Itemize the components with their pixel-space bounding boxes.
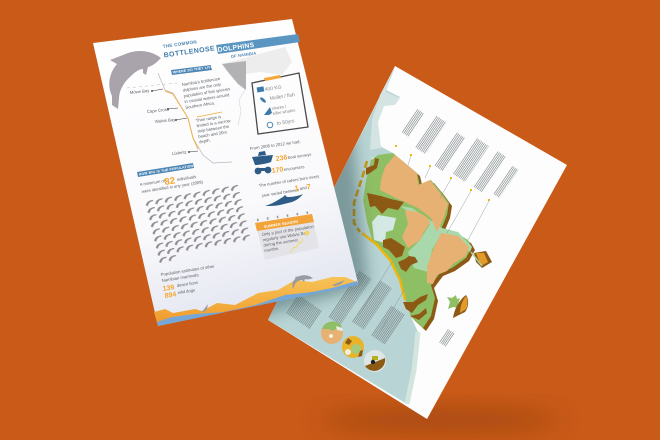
tan highlands middle xyxy=(402,210,430,248)
yellow coastal strip xyxy=(362,233,405,300)
caption block xyxy=(444,336,450,340)
title: BOTTLENOSE xyxy=(163,45,216,59)
front page cast shadow xyxy=(268,135,374,322)
stat: other mammals: desert lions xyxy=(176,280,198,288)
tan highlands south xyxy=(427,233,469,284)
calendar: summer season: SUMMER SEASON xyxy=(264,220,299,229)
stat: calves xyxy=(258,173,321,206)
place labels and arrows xyxy=(127,83,198,156)
stat: survey intro: From 2008 to 2012 we had: xyxy=(249,139,301,151)
calendar: summer season: during the summer xyxy=(263,237,299,248)
place labels and arrows: Walvis Bay xyxy=(155,117,176,124)
icon: footer fins xyxy=(202,280,345,312)
panel: back page map poster xyxy=(268,66,567,419)
stat: minimum individuals: were identified in any year (2009) xyxy=(141,179,204,194)
icon: weight xyxy=(257,86,264,92)
title: DOLPHINS xyxy=(217,42,255,54)
clipboard rows: to 50yrs xyxy=(276,118,295,127)
clipboard rows: sharks / xyxy=(271,104,287,111)
title: THE COMMON xyxy=(162,39,198,49)
map land xyxy=(363,153,472,328)
stat: encounters: 170 xyxy=(271,166,284,175)
place labels and arrows: Cape Cross xyxy=(147,107,169,114)
stat: boat surveys: 236 xyxy=(275,154,288,163)
icon: leaping dolphin xyxy=(109,51,161,109)
icon: clock xyxy=(267,122,273,128)
text block: population: population of this species xyxy=(183,86,230,98)
stat: calves: 1 xyxy=(294,183,299,193)
text blocks: upper column xyxy=(395,121,509,240)
icon: circle habitat 1 xyxy=(321,321,343,344)
icon: clipboard clip xyxy=(264,75,281,81)
coast mint strip xyxy=(407,332,418,404)
stat: other mammals: 139 xyxy=(162,284,175,293)
map: Namibia outline xyxy=(158,47,292,163)
calendar: summer season: regularly use Walvis Bay xyxy=(262,230,309,242)
heading: population size: HOW BIG IS THE POPULATION? xyxy=(139,164,196,176)
stat: calves: The number of calves born every xyxy=(258,173,321,188)
stat: encounters xyxy=(255,164,305,175)
map relief shadow xyxy=(366,156,475,331)
text block: population: dolphins are the only xyxy=(182,82,222,93)
footer: dune wave xyxy=(154,277,358,326)
clipboard rows: Mullet / fish xyxy=(269,92,296,102)
icon: dolphin and calf xyxy=(265,194,303,206)
stat: minimum individuals: individuals xyxy=(176,174,196,182)
text block: population: Namibia's bottlenose xyxy=(181,76,221,87)
title xyxy=(162,34,300,59)
footer: sea band xyxy=(157,281,358,326)
title: OF NAMIBIA xyxy=(230,50,257,59)
mockup scene xyxy=(93,19,567,440)
text block: range: limited to a narrow xyxy=(196,118,232,128)
pictogram: 82 dolphins xyxy=(144,183,252,264)
text block: population: Southern Africa. xyxy=(185,100,215,110)
ground shadow xyxy=(320,410,560,430)
calendar: summer season xyxy=(255,212,319,260)
text blocks: sea column xyxy=(292,262,404,332)
panel: front page dolphin infographic xyxy=(93,19,358,326)
clipboard xyxy=(252,73,308,134)
text block: range: beach and 20m xyxy=(198,129,228,139)
icon: circle habitat 3 xyxy=(364,350,386,372)
icon: shark xyxy=(264,107,272,115)
stat: other mammals: wild dogs xyxy=(177,287,195,295)
dashed coastal zones xyxy=(354,161,367,232)
clipboard rows: 400 KG xyxy=(264,84,282,93)
calendar: summer season: months. xyxy=(264,246,279,253)
place labels and arrows: Lüderitz xyxy=(172,149,187,156)
clipboard rows xyxy=(264,84,296,127)
stat: minimum individuals: A minimum of xyxy=(139,178,166,187)
stat: minimum individuals: 82 xyxy=(164,175,176,188)
text block: range: Their range is xyxy=(195,114,221,123)
clipboard rows: killer whales xyxy=(272,107,296,116)
tan highlands north xyxy=(380,155,448,232)
text block: range: depth. xyxy=(199,138,211,144)
sea xyxy=(268,67,418,404)
stat: encounters: encounters xyxy=(283,164,305,172)
brown relief blotches xyxy=(366,158,428,320)
icon: sun xyxy=(305,231,309,235)
stat: calves: 7 xyxy=(306,182,311,191)
heading: where do they live: WHERE DO THEY LIVE? xyxy=(173,65,216,74)
icon: circle habitat 2 xyxy=(342,336,364,358)
stat: other mammals xyxy=(160,263,215,300)
calendar: summer season: Only a part of the population xyxy=(261,224,315,237)
stat: calves: and xyxy=(299,185,308,191)
text block: range: strip between the xyxy=(197,124,230,134)
text block: population: in coastal waters around xyxy=(184,92,230,104)
stat: calves: year varied between xyxy=(261,187,300,198)
icon: footer dolphin xyxy=(292,275,313,289)
lake xyxy=(372,215,396,243)
stat: boat surveys: boat surveys xyxy=(287,152,312,160)
chart: rising line xyxy=(290,238,303,253)
stat: other mammals: 894 xyxy=(164,291,177,300)
stat: other mammals: Population estimates of other xyxy=(160,263,215,277)
icon: leaf and land section xyxy=(447,295,468,318)
icon: fish xyxy=(259,97,267,103)
pale green river valleys xyxy=(400,206,472,272)
island detail xyxy=(471,251,492,268)
stat: other mammals: Namibian mammals: xyxy=(161,272,200,283)
place labels and arrows: Möwe Bay xyxy=(130,88,150,95)
stat: boat surveys xyxy=(252,151,312,165)
cloud patch xyxy=(370,72,400,150)
